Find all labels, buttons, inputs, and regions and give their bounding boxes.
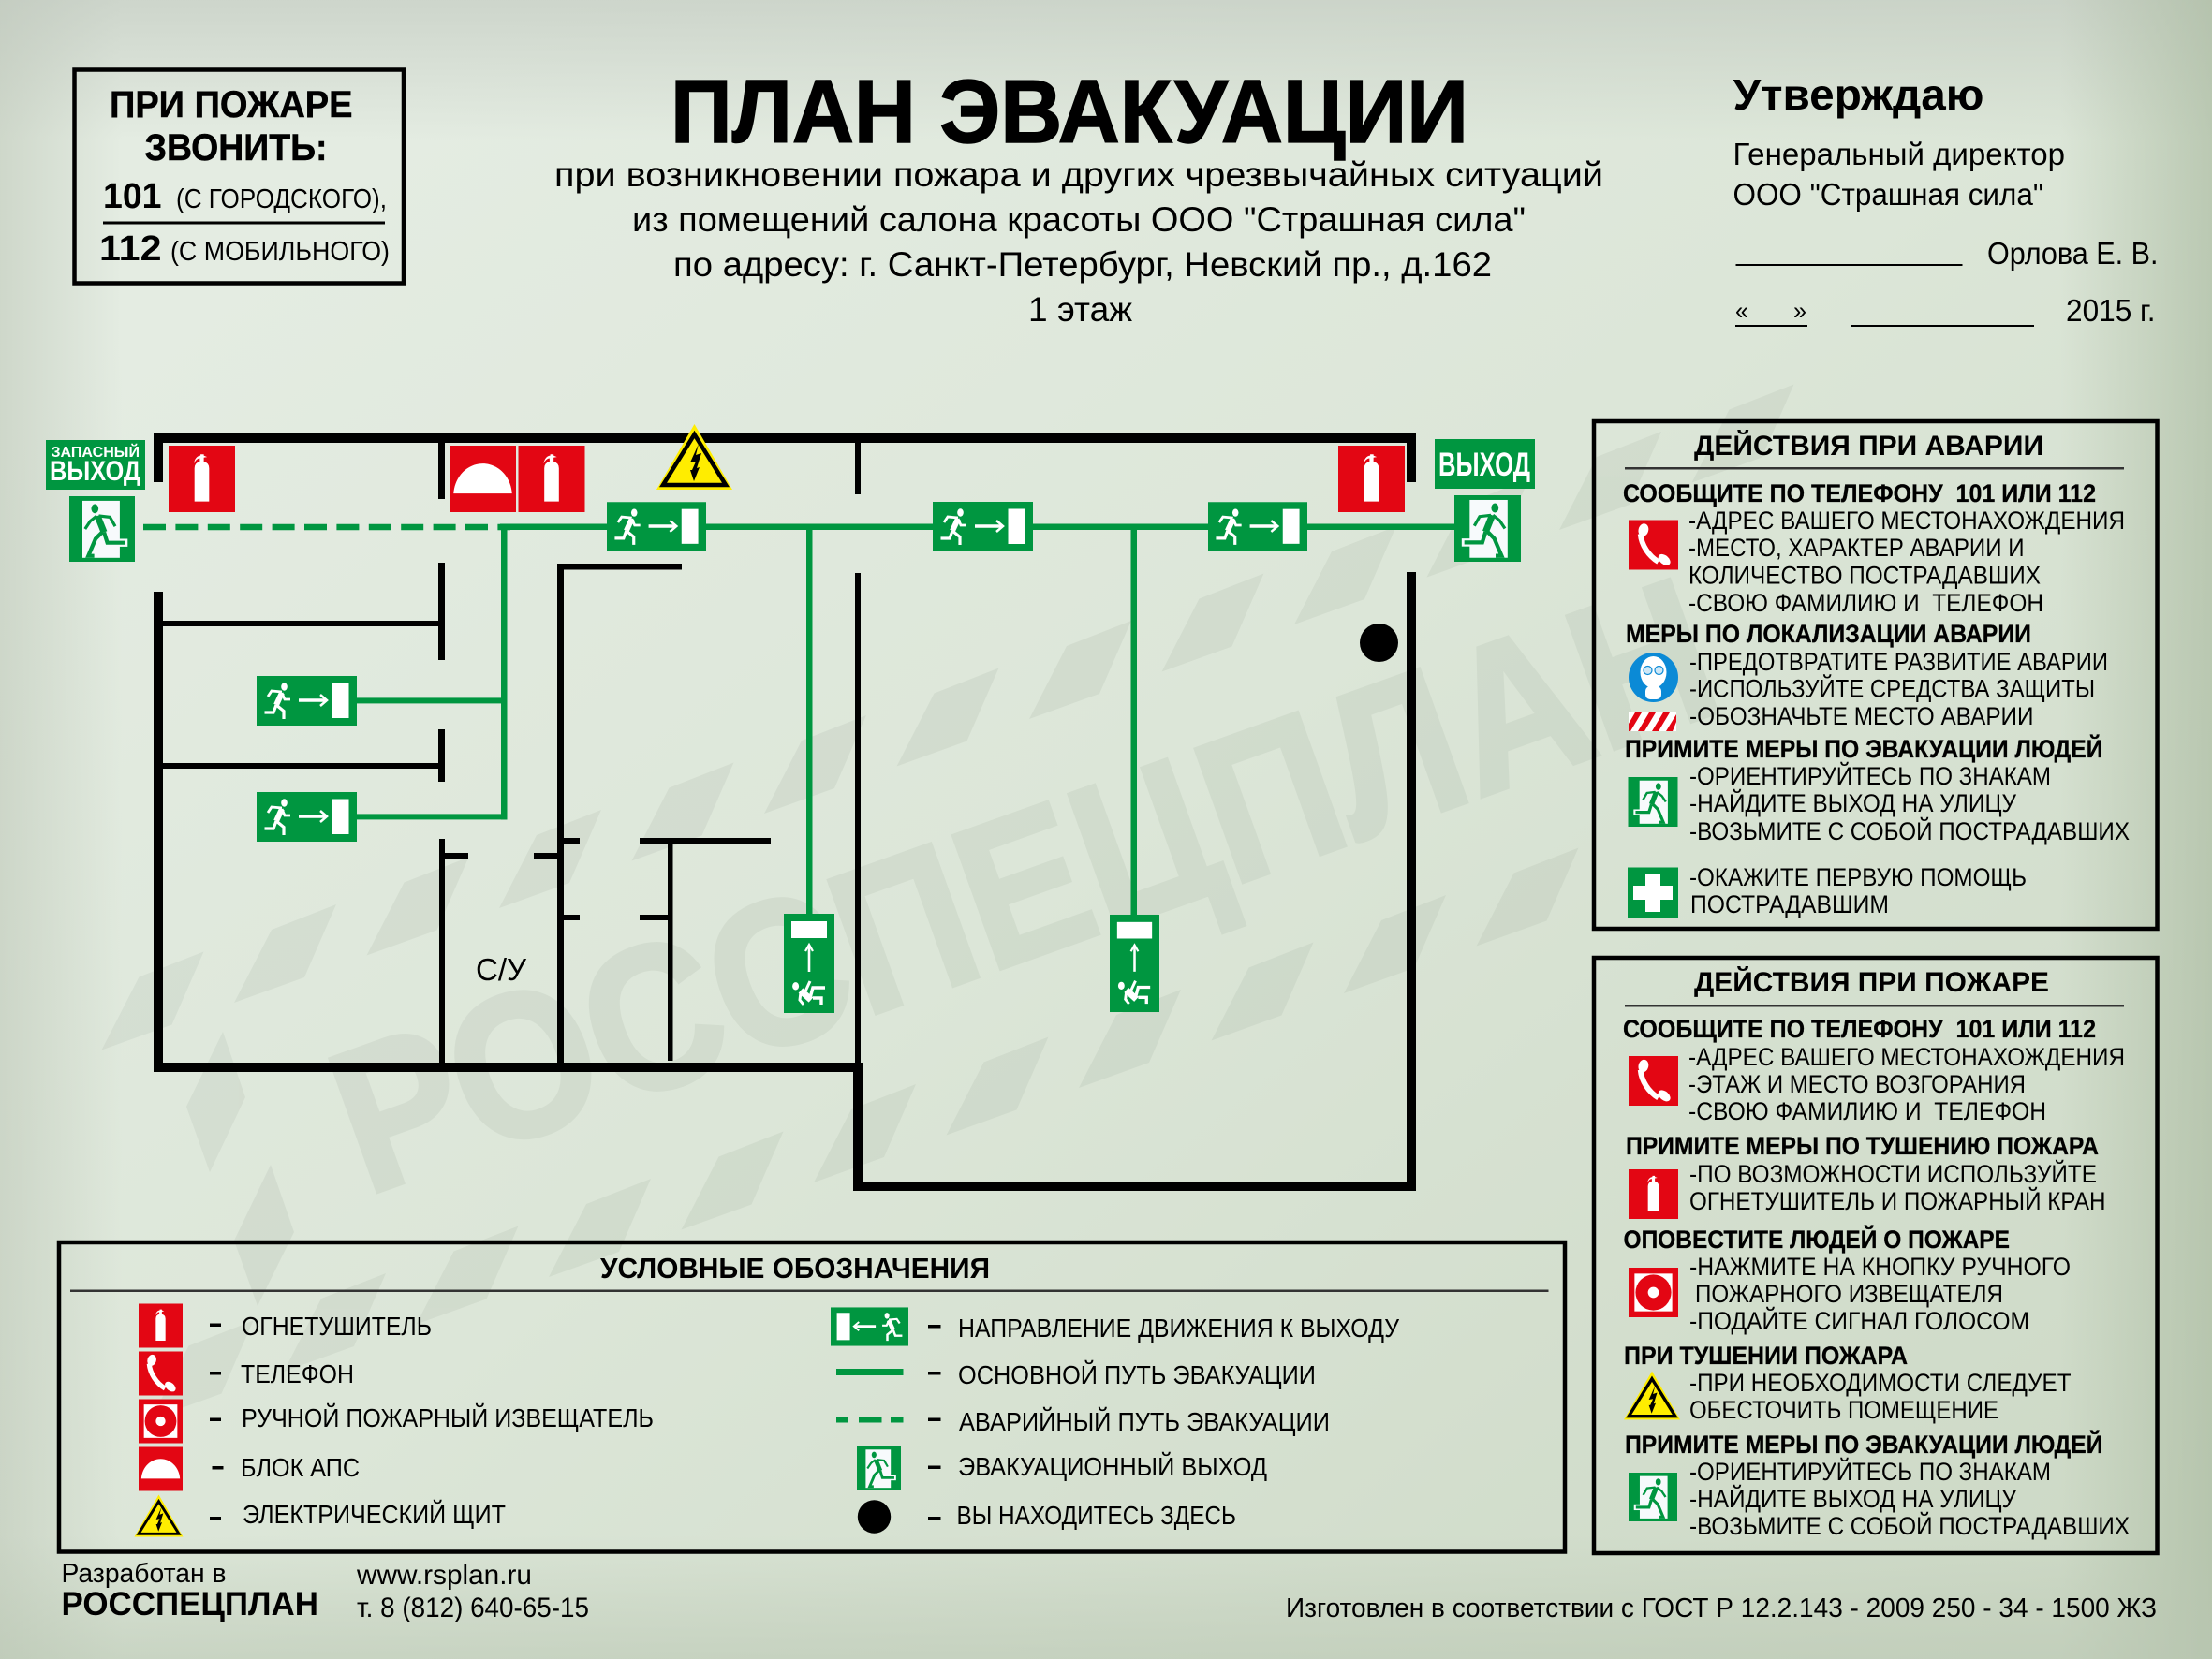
section: report by phone: -ЭТАЖ И МЕСТО ВОЗГОРАНИЯ <box>1688 1070 2026 1098</box>
legend: emergency route <box>836 1407 1330 1436</box>
icon: main exit door <box>1454 495 1521 562</box>
legend: APS block <box>139 1447 360 1490</box>
section: localisation <box>1626 620 2108 730</box>
section: first aid <box>1689 863 2027 918</box>
section: evacuate people: -ОРИЕНТИРУЙТЕСЬ ПО ЗНАКАМ <box>1689 761 2051 790</box>
exit label <box>1435 439 1535 489</box>
approval block: Орлова Е. В. <box>1987 236 2158 271</box>
approval block: 2015 г. <box>2066 293 2156 328</box>
heading: accident actions: ДЕЙСТВИЯ ПРИ АВАРИИ <box>1694 430 2043 462</box>
upward exit sign 1 <box>784 914 834 1013</box>
section: localisation: МЕРЫ ПО ЛОКАЛИЗАЦИИ АВАРИИ <box>1626 620 2031 648</box>
section: evacuate people <box>1625 1430 2130 1540</box>
icon: extinguisher plan middle <box>519 446 584 512</box>
section: extinguishing: ПРИМИТЕ МЕРЫ ПО ТУШЕНИЮ ПОЖАРА <box>1626 1132 2099 1160</box>
number 101: 101 <box>103 177 161 216</box>
exit label: ВЫХОД <box>1438 447 1530 483</box>
section: localisation: -ИСПОЛЬЗУЙТЕ СРЕДСТВА ЗАЩИТЫ <box>1689 674 2095 702</box>
subtitle <box>554 155 1603 329</box>
contacts: т. 8 (812) 640-65-15 <box>357 1593 589 1623</box>
section: first aid: ПОСТРАДАВШИМ <box>1690 890 1889 918</box>
title: ПЛАН ЭВАКУАЦИИ <box>671 62 1468 162</box>
you are here marker <box>1360 624 1398 662</box>
label: restroom: С/У <box>476 952 527 987</box>
icon: telephone <box>1629 521 1678 569</box>
section: report by phone: КОЛИЧЕСТВО ПОСТРАДАВШИХ <box>1688 562 2041 590</box>
legend: manual call point <box>139 1399 654 1444</box>
main evacuation route <box>356 524 1457 916</box>
section: report by phone: СООБЩИТЕ ПО ТЕЛЕФОНУ 101 ИЛИ 112 <box>1623 1015 2096 1043</box>
upward exit sign 2 <box>1110 915 1159 1012</box>
spare exit label: ВЫХОД <box>50 456 140 487</box>
section: report by phone: -СВОЮ ФАМИЛИЮ И ТЕЛЕФОН <box>1688 1097 2046 1125</box>
heading: call on fire: ЗВОНИТЬ: <box>144 127 328 169</box>
icon: APS block plan <box>450 446 516 512</box>
legend: extinguisher: ОГНЕТУШИТЕЛЬ <box>242 1312 432 1341</box>
icon: first aid cross <box>1628 867 1678 918</box>
section: while extinguishing: ОБЕСТОЧИТЬ ПОМЕЩЕНИЕ <box>1689 1396 1998 1424</box>
legend: evacuation exit: ЭВАКУАЦИОННЫЙ ВЫХОД <box>958 1452 1267 1481</box>
heading: fire actions: ДЕЙСТВИЯ ПРИ ПОЖАРЕ <box>1694 966 2049 998</box>
number 101 <box>103 177 387 216</box>
section: notify people: ОПОВЕСТИТЕ ЛЮДЕЙ О ПОЖАРЕ <box>1624 1225 2010 1254</box>
legend: manual call point: РУЧНОЙ ПОЖАРНЫЙ ИЗВЕЩАТЕЛЬ <box>242 1403 654 1432</box>
heading: legend: УСЛОВНЫЕ ОБОЗНАЧЕНИЯ <box>600 1252 990 1285</box>
section: notify people: -НАЖМИТЕ НА КНОПКУ РУЧНОГО <box>1689 1253 2071 1281</box>
approval block: Утверждаю <box>1733 70 1983 119</box>
legend: main route <box>836 1360 1316 1389</box>
approval block: Генеральный директор <box>1733 137 2065 171</box>
icon: exit <box>1629 1473 1677 1521</box>
legend: electrical panel <box>135 1495 506 1536</box>
contacts <box>356 1560 589 1623</box>
developer credit <box>62 1559 318 1622</box>
section: evacuate people: -ВОЗЬМИТЕ С СОБОЙ ПОСТРАДАВШИХ <box>1689 816 2130 845</box>
section: notify people: -ПОДАЙТЕ СИГНАЛ ГОЛОСОМ <box>1689 1306 2029 1335</box>
section: while extinguishing: -ПРИ НЕОБХОДИМОСТИ СЛЕДУЕТ <box>1689 1369 2072 1397</box>
section: report by phone: -МЕСТО, ХАРАКТЕР АВАРИИ И <box>1688 534 2025 562</box>
icon: extinguisher plan right <box>1338 446 1405 512</box>
section: evacuate people <box>1625 734 2130 845</box>
legend: you are here <box>858 1500 1236 1534</box>
section: evacuate people: -НАЙДИТЕ ВЫХОД НА УЛИЦУ <box>1689 788 2017 817</box>
watermark РОССПЕЦПЛАН: РОССПЕЦПЛАН <box>304 536 1743 1237</box>
legend: APS block: БЛОК АПС <box>241 1453 360 1482</box>
number 112 <box>99 229 390 269</box>
direction sign 1 <box>607 502 706 551</box>
section: evacuate people: ПРИМИТЕ МЕРЫ ПО ЭВАКУАЦИИ ЛЮДЕЙ <box>1625 1430 2103 1459</box>
section: extinguishing <box>1626 1132 2105 1215</box>
section: report by phone <box>1623 1015 2125 1125</box>
legend: electrical panel: ЭЛЕКТРИЧЕСКИЙ ЩИТ <box>243 1500 506 1529</box>
floor plan walls <box>154 433 1416 1191</box>
legend: evacuation exit <box>857 1446 1267 1490</box>
section: notify people: ПОЖАРНОГО ИЗВЕЩАТЕЛЯ <box>1695 1280 2003 1308</box>
standard note: Изготовлен в соответствии с ГОСТ Р 12.2.143 - 2009 250 - 34 - 1500 ЖЗ <box>1286 1593 2157 1623</box>
subtitle: 1 этаж <box>1028 290 1132 329</box>
section: report by phone: -АДРЕС ВАШЕГО МЕСТОНАХОЖДЕНИЯ <box>1688 1043 2125 1071</box>
icon: telephone <box>1629 1056 1678 1106</box>
approval block: ООО "Страшная сила" <box>1733 177 2043 212</box>
subtitle: из помещений салона красоты ООО "Страшная сила" <box>632 200 1526 239</box>
contacts: www.rsplan.ru <box>356 1560 532 1591</box>
section: localisation: -ОБОЗНАЧЬТЕ МЕСТО АВАРИИ <box>1689 702 2034 730</box>
legend: extinguisher <box>139 1303 432 1348</box>
direction sign 3 <box>1208 502 1307 551</box>
spare exit label: ЗАПАСНЫЙ <box>51 444 140 461</box>
legend: direction to exit: НАПРАВЛЕНИЕ ДВИЖЕНИЯ К ВЫХОДУ <box>958 1314 1399 1343</box>
approval block <box>1733 70 2158 328</box>
panel: fire phone numbers <box>75 69 404 283</box>
section: report by phone: -АДРЕС ВАШЕГО МЕСТОНАХОЖДЕНИЯ <box>1688 507 2125 535</box>
icon: spare exit door <box>69 496 135 562</box>
developer credit: Разработан в <box>62 1559 227 1589</box>
legend: telephone: ТЕЛЕФОН <box>241 1359 354 1388</box>
legend: telephone <box>139 1352 354 1395</box>
icon: extinguisher <box>1629 1169 1678 1219</box>
section: report by phone: СООБЩИТЕ ПО ТЕЛЕФОНУ 101 ИЛИ 112 <box>1623 479 2096 507</box>
direction sign 5 <box>257 792 357 842</box>
section: report by phone: -СВОЮ ФАМИЛИЮ И ТЕЛЕФОН <box>1688 589 2043 617</box>
section: while extinguishing: ПРИ ТУШЕНИИ ПОЖАРА <box>1624 1342 1908 1370</box>
approval block: « <box>1735 297 1748 325</box>
legend: you are here: ВЫ НАХОДИТЕСЬ ЗДЕСЬ <box>957 1501 1236 1530</box>
panel: legend <box>59 1242 1565 1552</box>
icon: fire alarm <box>1629 1268 1678 1317</box>
section: while extinguishing <box>1624 1342 2072 1424</box>
legend: main route: ОСНОВНОЙ ПУТЬ ЭВАКУАЦИИ <box>958 1360 1316 1389</box>
legend: emergency route: АВАРИЙНЫЙ ПУТЬ ЭВАКУАЦИИ <box>959 1407 1330 1436</box>
section: evacuate people: -НАЙДИТЕ ВЫХОД НА УЛИЦУ <box>1689 1484 2017 1513</box>
icon: gas mask <box>1629 653 1678 702</box>
heading: call on fire <box>110 84 352 169</box>
section: extinguishing: ОГНЕТУШИТЕЛЬ И ПОЖАРНЫЙ КРАН <box>1689 1186 2105 1215</box>
spare exit label <box>46 440 145 490</box>
number 112: (С МОБИЛЬНОГО) <box>170 237 390 267</box>
icon: electrical hazard <box>1624 1372 1680 1419</box>
icon: exit <box>1628 777 1678 827</box>
section: notify people <box>1624 1225 2071 1335</box>
section: localisation: -ПРЕДОТВРАТИТЕ РАЗВИТИЕ АВАРИИ <box>1689 648 2108 676</box>
icon: hazard stripes <box>1629 712 1676 731</box>
section: report by phone <box>1623 479 2125 617</box>
number 112: 112 <box>99 229 161 269</box>
emergency route dashed <box>143 524 510 530</box>
panel: actions on accident <box>1594 421 2158 929</box>
section: extinguishing: -ПО ВОЗМОЖНОСТИ ИСПОЛЬЗУЙТЕ <box>1689 1159 2097 1188</box>
icon: electrical panel <box>656 424 732 490</box>
section: evacuate people: ПРИМИТЕ МЕРЫ ПО ЭВАКУАЦИИ ЛЮДЕЙ <box>1625 734 2103 763</box>
heading: call on fire: ПРИ ПОЖАРЕ <box>110 84 352 125</box>
number 101: (С ГОРОДСКОГО), <box>176 184 387 214</box>
developer credit: РОССПЕЦПЛАН <box>62 1586 318 1622</box>
section: first aid: -ОКАЖИТЕ ПЕРВУЮ ПОМОЩЬ <box>1689 863 2027 891</box>
subtitle: по адресу: г. Санкт-Петербург, Невский пр., д.162 <box>673 245 1492 284</box>
subtitle: при возникновении пожара и других чрезвычайных ситуаций <box>554 155 1603 194</box>
approval block: » <box>1793 297 1806 325</box>
legend: direction to exit <box>831 1307 1399 1346</box>
direction sign 2 <box>933 502 1033 551</box>
direction sign 4 <box>257 676 357 726</box>
section: evacuate people: -ВОЗЬМИТЕ С СОБОЙ ПОСТРАДАВШИХ <box>1689 1511 2130 1540</box>
section: evacuate people: -ОРИЕНТИРУЙТЕСЬ ПО ЗНАКАМ <box>1689 1457 2051 1486</box>
icon: extinguisher plan left <box>169 446 235 512</box>
panel: actions on fire <box>1594 958 2158 1553</box>
